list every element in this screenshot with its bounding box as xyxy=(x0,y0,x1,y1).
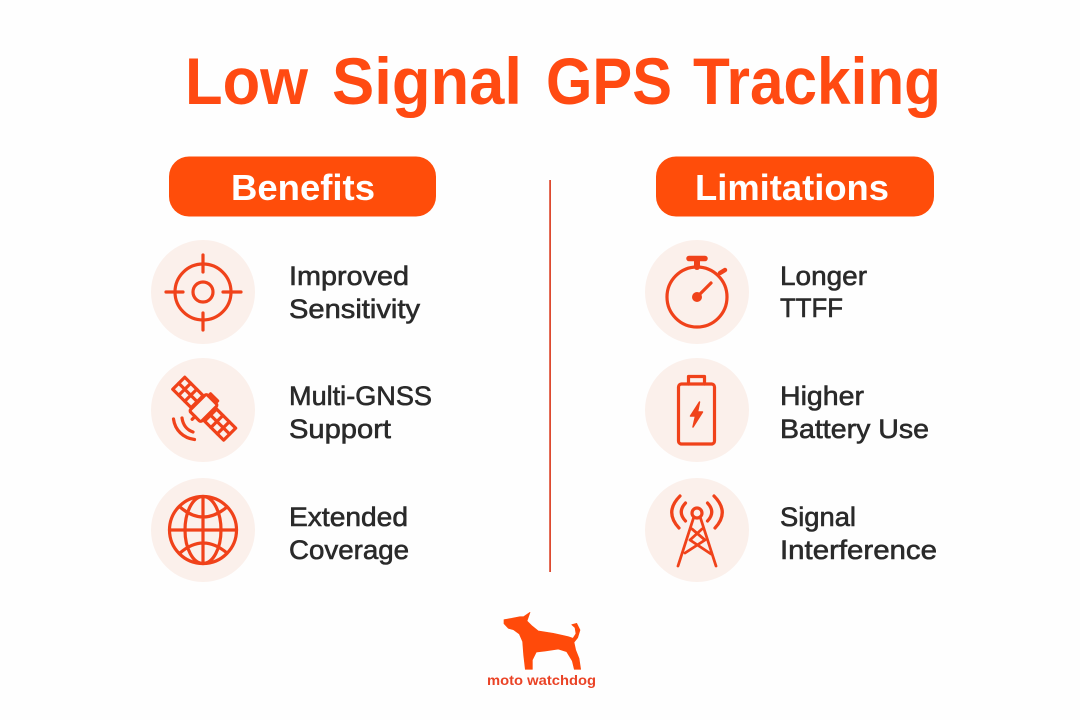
icon: satellite xyxy=(151,358,255,462)
text: longer ttff: TTFF xyxy=(780,293,843,323)
text: higher battery use: Higher xyxy=(780,381,864,411)
text: higher battery use: Battery Use xyxy=(780,414,929,444)
text: extended coverage: Extended xyxy=(289,502,408,532)
text: improved sensitivity xyxy=(289,261,421,324)
text: extended coverage xyxy=(289,502,409,565)
text: improved sensitivity: Improved xyxy=(289,261,409,291)
logo: moto watchdog xyxy=(487,612,596,688)
panel: limitations xyxy=(645,156,937,582)
heading: benefits: Benefits xyxy=(231,167,375,208)
title: Tracking xyxy=(693,44,941,118)
icon: globe xyxy=(151,478,255,582)
text: higher battery use xyxy=(780,381,929,444)
title: Signal xyxy=(332,44,522,118)
logo: moto watchdog: moto watchdog xyxy=(487,673,596,688)
title xyxy=(185,44,941,118)
text: signal interference xyxy=(780,502,937,565)
heading: benefits xyxy=(169,156,436,216)
icon: dog xyxy=(504,612,581,669)
text: multi-gnss support: Multi-GNSS xyxy=(289,381,432,411)
title: GPS xyxy=(546,44,672,118)
icon: signal tower xyxy=(645,478,749,582)
text: signal interference: Interference xyxy=(780,535,937,565)
text: longer ttff xyxy=(780,261,867,323)
title: Low xyxy=(185,44,309,118)
text: multi-gnss support xyxy=(289,381,432,444)
icon: battery xyxy=(645,358,749,462)
icon: target crosshair xyxy=(151,240,255,344)
text: signal interference: Signal xyxy=(780,502,856,532)
text: multi-gnss support: Support xyxy=(289,414,392,444)
text: extended coverage: Coverage xyxy=(289,535,409,565)
text: improved sensitivity: Sensitivity xyxy=(289,294,421,324)
text: longer ttff: Longer xyxy=(780,261,867,291)
heading: limitations: Limitations xyxy=(695,167,889,208)
heading: limitations xyxy=(656,156,934,216)
icon: stopwatch xyxy=(645,240,749,344)
panel: benefits xyxy=(151,156,436,582)
